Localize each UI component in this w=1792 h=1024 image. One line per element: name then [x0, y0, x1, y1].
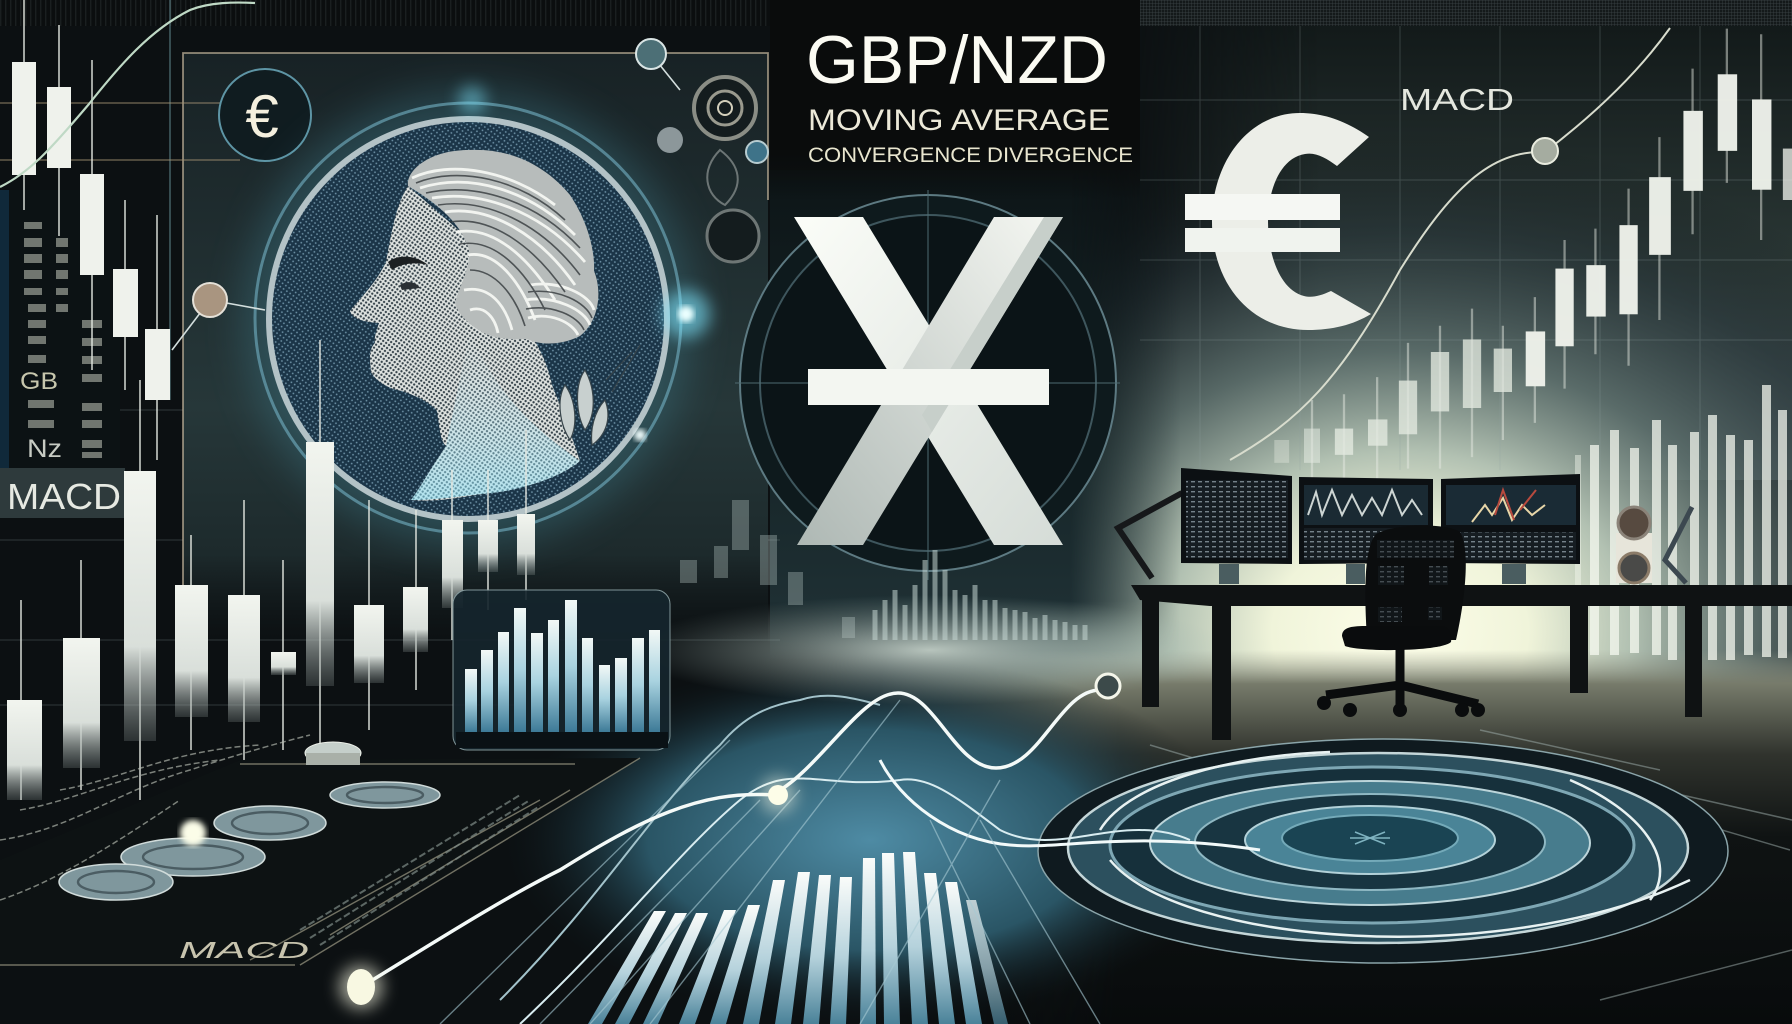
icon: small euro badge: € [245, 83, 279, 150]
panel: coin frame [0, 0, 768, 643]
decorative nodes and rings [172, 39, 768, 350]
desk [1131, 585, 1792, 740]
curve: upper-left trend line [0, 3, 255, 187]
label: NZ: Nz [27, 435, 62, 463]
icon: small euro badge [219, 69, 311, 161]
office chair [1317, 525, 1485, 717]
floor: coin tray [0, 735, 640, 965]
illustration: portrait coin [243, 86, 710, 546]
monitor: left [1181, 468, 1292, 564]
floor: spiral rings [1038, 739, 1728, 963]
label: MACD left tag: MACD [7, 476, 121, 517]
label: MACD left tag [0, 468, 125, 518]
label: GB: GB [20, 368, 58, 395]
text: MACD upper right: MACD [1400, 82, 1514, 117]
text: MACD italic: MACD [179, 937, 309, 963]
icon: large X symbol [735, 190, 1120, 580]
portrait: hair [408, 150, 598, 344]
title block [806, 22, 1133, 167]
title: GBP/NZD: GBP/NZD [806, 22, 1108, 98]
trend line with marker [1230, 28, 1670, 460]
chart: faint vertical bars behind the desk [1575, 385, 1787, 660]
subtitle: moving average: MOVING AVERAGE [808, 104, 1110, 137]
chart: distant faded histogram [875, 550, 1085, 640]
portrait: head and bust [350, 150, 640, 501]
subtitle: convergence divergence: CONVERGENCE DIVERGENCE [808, 144, 1133, 167]
table: left data column [0, 190, 120, 468]
monitor: right [1441, 474, 1580, 564]
chart: left candlesticks [7, 0, 855, 800]
lines: MACD signal curves [361, 690, 1260, 1024]
monitor: center [1299, 477, 1433, 564]
chart: right candlesticks [1274, 29, 1792, 486]
markers: glowing line nodes [339, 674, 1120, 1009]
chart: small bar chart panel [453, 590, 670, 750]
desk lamp [1118, 493, 1182, 578]
icon: large euro symbol [1185, 113, 1371, 330]
portrait: laurel leaves [560, 345, 640, 445]
chart: foreground histogram [588, 852, 1008, 1024]
furniture: desk with monitors and chair [1118, 468, 1792, 740]
monitor stands [1219, 564, 1526, 584]
speakers [1616, 507, 1652, 583]
coin stack [59, 742, 440, 900]
